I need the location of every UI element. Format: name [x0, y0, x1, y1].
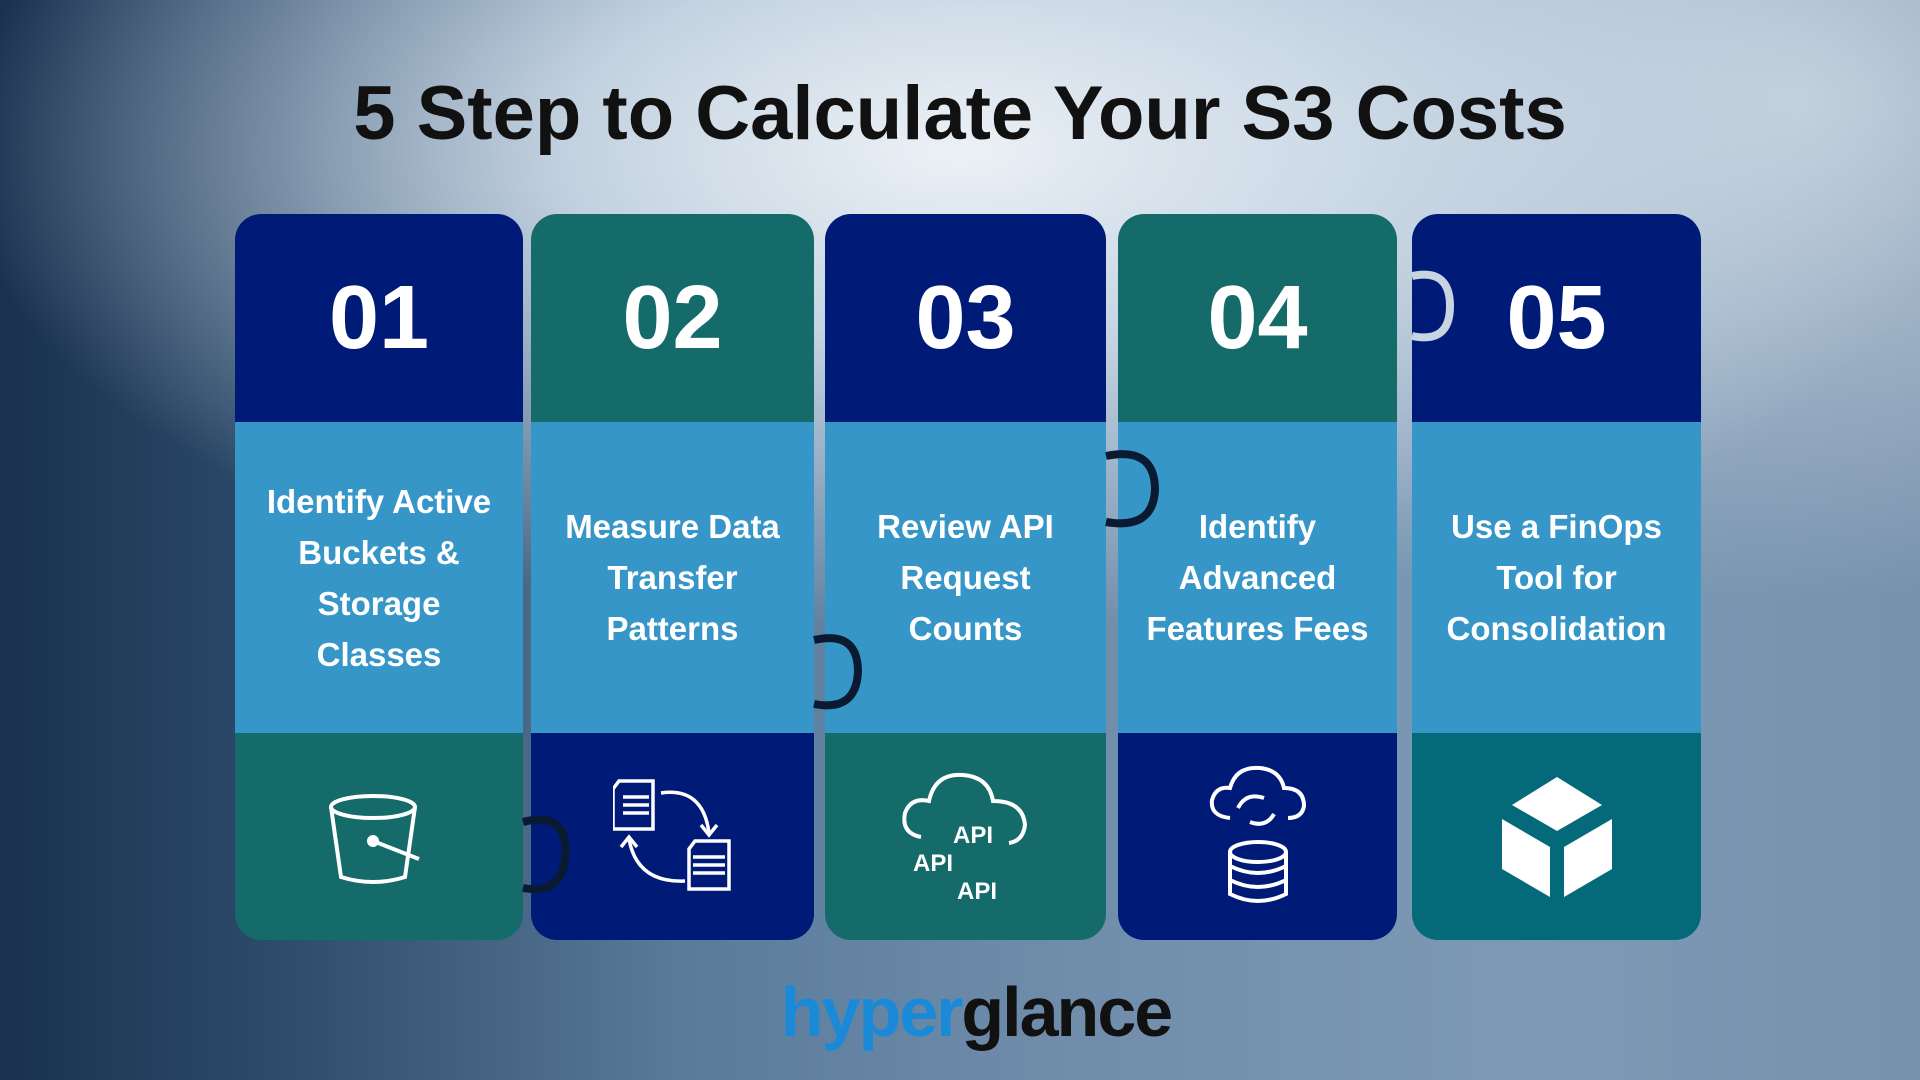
- card 5: Consolidation: [1446, 610, 1666, 647]
- card 1: [235, 214, 523, 940]
- card 3: Counts: [909, 610, 1022, 647]
- card 3: 03: [915, 268, 1016, 368]
- card 2: Patterns: [606, 610, 739, 647]
- card 5: 05: [1506, 268, 1607, 368]
- icon: file transfer: [531, 733, 814, 940]
- icon: cloud API: [825, 733, 1106, 940]
- icon: cloud API: API: [952, 822, 993, 848]
- card 4: [1118, 214, 1397, 940]
- icon: cloud API: API: [956, 878, 997, 904]
- card 1: Identify Active: [267, 482, 491, 520]
- card 2: [531, 214, 814, 940]
- card 4: 04: [1207, 268, 1308, 368]
- title: 5 Step to Calculate Your S3 Costs: [353, 71, 1567, 156]
- icon: cube: [1412, 733, 1701, 940]
- card 2: Transfer: [607, 559, 738, 596]
- icon: cloud API: API: [912, 850, 953, 876]
- card 1: Classes: [317, 636, 441, 672]
- card 5: Use a FinOps: [1451, 508, 1662, 545]
- card 5: [1412, 214, 1701, 940]
- card 2: Measure Data: [565, 508, 780, 545]
- card 4: Advanced: [1179, 559, 1336, 596]
- icon: bucket: [235, 733, 523, 940]
- card 3: Request: [900, 559, 1031, 596]
- card 1: Buckets &: [298, 534, 460, 570]
- card 3: Review API: [877, 508, 1054, 545]
- icon: cloud database: [1118, 733, 1397, 940]
- card 4: Features Fees: [1147, 610, 1368, 647]
- card 4: Identify: [1199, 508, 1316, 545]
- logo: hyperglance: [781, 973, 1171, 1051]
- card 5: Tool for: [1496, 559, 1617, 596]
- card 1: 01: [329, 268, 429, 368]
- card 1: Storage: [318, 584, 440, 622]
- card 3: [825, 214, 1106, 940]
- card 2: 02: [622, 268, 723, 368]
